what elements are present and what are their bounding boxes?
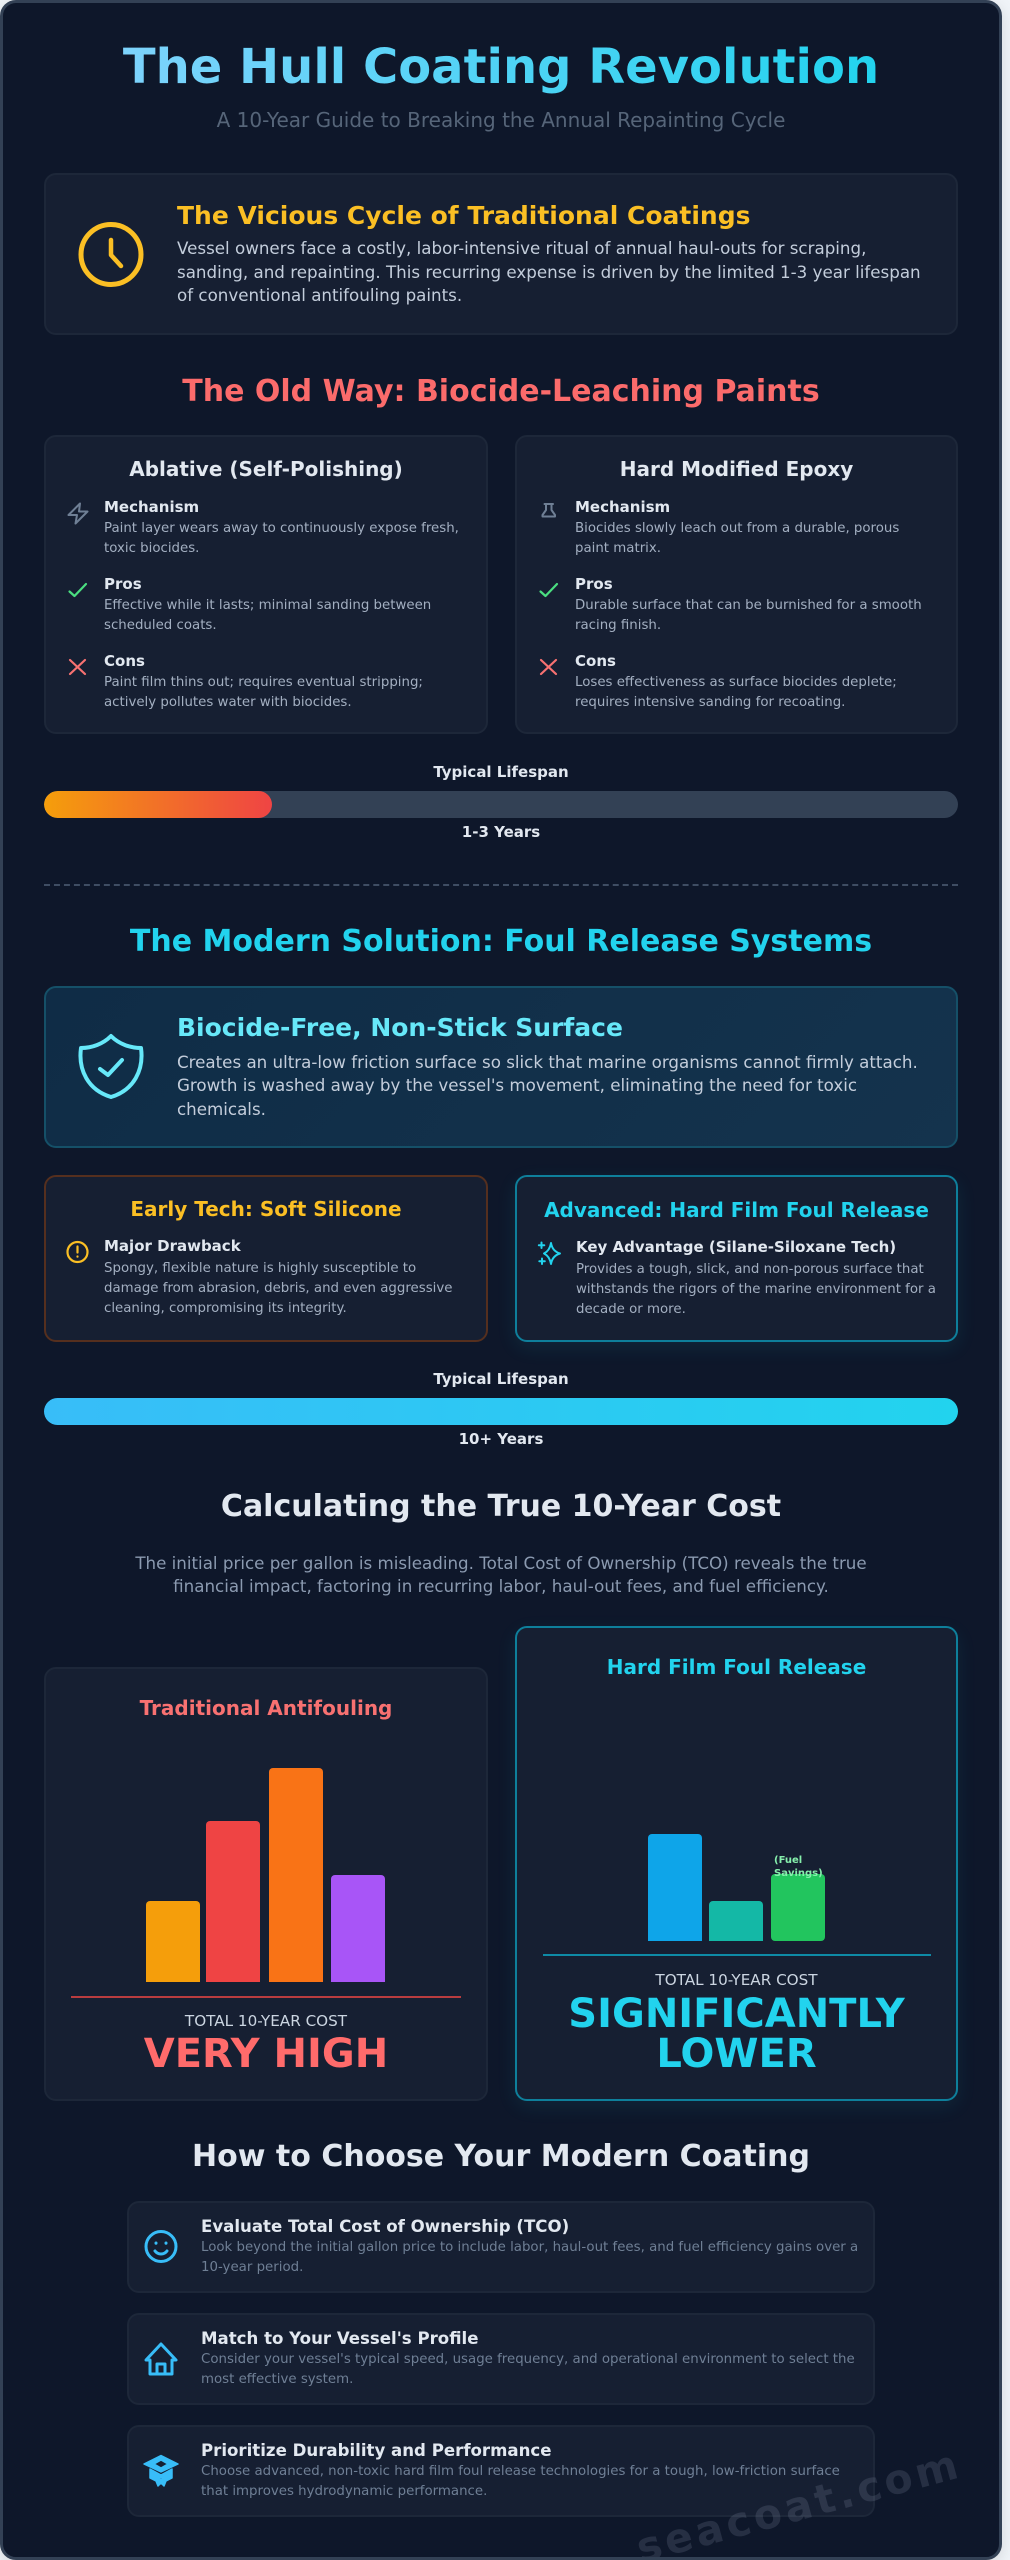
bar label: (Fuel [774, 1855, 802, 1866]
heading: the old way: The Old Way: Biocide-Leaching Paints [182, 374, 820, 409]
heading: modern solution: The Modern Solution: Foul Release Systems [130, 924, 872, 959]
cons text: Paint film thins out; requires eventual stripping; [104, 675, 423, 690]
panel: advanced hard film [515, 1175, 958, 1342]
body text: Growth is washed away by the vessel's movement, eliminating the need for toxic [177, 1075, 857, 1095]
icon: cross [540, 658, 558, 676]
step text: most effective system. [201, 2372, 353, 2387]
drawback text [104, 1261, 452, 1316]
panel: early tech [44, 1175, 488, 1342]
total label: TOTAL 10-YEAR COST [655, 1971, 818, 1989]
body text [177, 1052, 918, 1119]
heading: how to choose: How to Choose Your Modern Coating [192, 2139, 810, 2174]
pros text [575, 598, 922, 633]
panel: hard film cost [515, 1626, 958, 2101]
step text: that improves hydrodynamic performance. [201, 2484, 487, 2499]
step text [201, 2240, 858, 2275]
bar: orange [269, 1768, 323, 1982]
cons label: Cons [104, 652, 145, 670]
card heading: Hard Film Foul Release [607, 1655, 866, 1679]
pros label: Pros [575, 575, 613, 593]
lifespan bar: old [44, 791, 958, 818]
bar chart [648, 1834, 825, 1941]
drawback label: Major Drawback [104, 1237, 241, 1255]
body text: Creates an ultra-low friction surface so slick that marine organisms cannot firmly attach. [177, 1052, 918, 1072]
cons text: requires intensive sanding for recoating. [575, 695, 845, 710]
heading: The Vicious Cycle of Traditional Coatings [177, 201, 750, 230]
step text [201, 2352, 855, 2387]
bar chart [146, 1768, 385, 1982]
total label: TOTAL 10-YEAR COST [185, 2012, 347, 2030]
pros text: Effective while it lasts; minimal sanding between [104, 598, 431, 613]
icon: cross [68, 658, 86, 676]
advantage text: Provides a tough, slick, and non-porous surface that [576, 1262, 924, 1277]
body text [177, 238, 921, 305]
step: vessel profile [127, 2313, 875, 2405]
lifespan bar: modern [44, 1398, 958, 1425]
cons text: Loses effectiveness as surface biocides deplete; [575, 675, 897, 690]
cons text [104, 675, 423, 710]
bar: red [206, 1821, 260, 1982]
intro paragraph: The initial price per gallon is misleading. Total Cost of Ownership (TCO) reveals the true [135, 1553, 867, 1573]
step text [201, 2464, 840, 2499]
step text: Choose advanced, non-toxic hard film foul release technologies for a tough, low-friction surface [201, 2464, 840, 2479]
cons text: actively pollutes water with biocides. [104, 695, 352, 710]
body text: sanding, and repainting. This recurring expense is driven by the limited 1-3 year lifespan [177, 262, 921, 282]
bar: blue [648, 1834, 702, 1941]
pros text: racing finish. [575, 618, 661, 633]
step: evaluate TCO [127, 2201, 875, 2293]
bar: teal [709, 1901, 763, 1941]
mechanism label: Mechanism [575, 498, 670, 516]
mechanism text [575, 521, 899, 556]
mechanism text: Paint layer wears away to continuously expose fresh, [104, 521, 459, 536]
drawback text: cleaning, compromising its integrity. [104, 1301, 347, 1316]
body text: Vessel owners face a costly, labor-intensive ritual of annual haul-outs for scraping, [177, 238, 866, 258]
mechanism text [104, 521, 459, 556]
icon: warning [66, 1240, 89, 1264]
intro paragraph: financial impact, factoring in recurring labor, haul-out fees, and fuel efficiency. [173, 1576, 829, 1596]
lifespan value: 10+ Years [459, 1430, 543, 1448]
icon: bolt [68, 502, 88, 524]
card heading: Early Tech: Soft Silicone [130, 1197, 402, 1221]
icon: sparkles [538, 1242, 561, 1265]
pros text [104, 598, 431, 633]
advantage text: withstands the rigors of the marine environment for a [576, 1282, 936, 1297]
advantage text [576, 1262, 936, 1317]
lifespan label: Typical Lifespan [433, 1370, 569, 1388]
lifespan label: Typical Lifespan [433, 763, 569, 781]
body text: chemicals. [177, 1099, 266, 1119]
mechanism text: paint matrix. [575, 541, 661, 556]
bar: amber [146, 1901, 200, 1982]
title: The Hull Coating Revolution [123, 39, 879, 95]
icon: shield [78, 1034, 144, 1099]
panel: hard modified epoxy [78, 435, 958, 1098]
panel: vicious cycle [44, 173, 958, 335]
total value: SIGNIFICANTLY [568, 1991, 905, 2037]
step title: Evaluate Total Cost of Ownership (TCO) [201, 2217, 569, 2236]
step title: Prioritize Durability and Performance [201, 2441, 552, 2460]
bar: purple [331, 1875, 385, 1982]
intro paragraph [135, 1553, 867, 1596]
pros label: Pros [104, 575, 142, 593]
card heading: Advanced: Hard Film Foul Release [544, 1198, 929, 1222]
drawback text: damage from abrasion, debris, and even aggressive [104, 1281, 452, 1296]
step text: 10-year period. [201, 2260, 303, 2275]
pros text: Durable surface that can be burnished for a smooth [575, 598, 922, 613]
step title: Match to Your Vessel's Profile [201, 2329, 478, 2348]
bar label [774, 1855, 823, 1879]
cons label: Cons [575, 652, 616, 670]
step: durability [127, 2425, 875, 2517]
mechanism text: Biocides slowly leach out from a durable, porous [575, 521, 899, 536]
heading: true cost: Calculating the True 10-Year Cost [221, 1489, 781, 1524]
total value: LOWER [656, 2031, 817, 2077]
advantage text: decade or more. [576, 1302, 686, 1317]
bar label: Savings) [774, 1868, 823, 1879]
bar: green [771, 1874, 825, 1941]
card heading: ablative: Ablative (Self-Polishing) [129, 457, 403, 481]
mechanism text: toxic biocides. [104, 541, 199, 556]
step text: Look beyond the initial gallon price to include labor, haul-out fees, and fuel efficiency gains over a [201, 2240, 858, 2255]
icon: home [144, 2342, 178, 2376]
step text: Consider your vessel's typical speed, usage frequency, and operational environment to select the [201, 2352, 855, 2367]
advantage label: Key Advantage (Silane-Siloxane Tech) [576, 1238, 896, 1256]
lifespan value: 1-3 Years [462, 823, 540, 841]
drawback text: Spongy, flexible nature is highly susceptible to [104, 1261, 416, 1276]
body text: of conventional antifouling paints. [177, 285, 462, 305]
cons text [575, 675, 897, 710]
icon: flask [542, 503, 556, 518]
total value: VERY HIGH [144, 2031, 388, 2077]
subtitle: A 10-Year Guide to Breaking the Annual Repainting Cycle [217, 108, 785, 132]
icon: check [539, 582, 558, 598]
icon: smile [144, 2230, 178, 2263]
icon: clock [78, 222, 144, 287]
card heading: epoxy: Hard Modified Epoxy [620, 457, 853, 481]
pros text: scheduled coats. [104, 618, 217, 633]
card heading: Traditional Antifouling [140, 1696, 392, 1720]
icon: check [68, 582, 88, 598]
heading: Biocide-Free, Non-Stick Surface [177, 1013, 623, 1042]
total value [568, 1991, 905, 2077]
mechanism label: Mechanism [104, 498, 199, 516]
panel: traditional cost [44, 1667, 488, 2101]
icon: graduation cap [143, 2454, 179, 2487]
bar fill [44, 791, 272, 818]
panel: ablative [44, 435, 553, 1098]
panel: biocide-free [44, 986, 958, 1148]
